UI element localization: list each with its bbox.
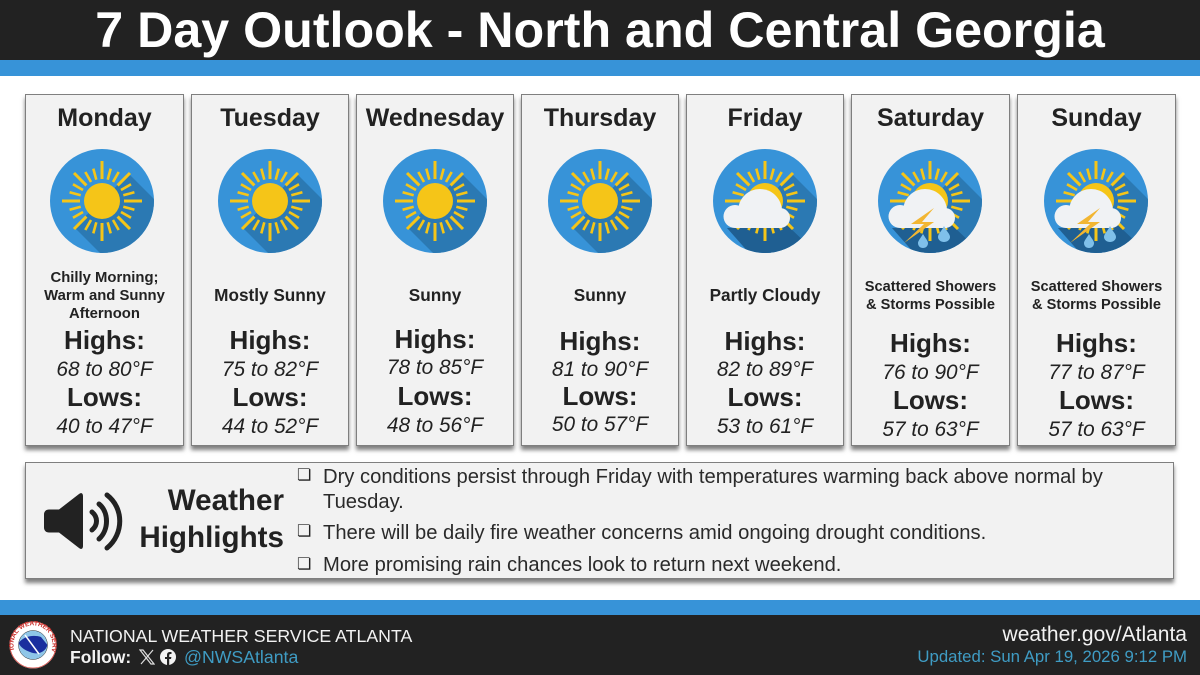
follow label: Follow: xyxy=(70,647,131,667)
bullet 1 text: Tuesday. xyxy=(323,490,404,512)
highs range: 75 to 82°F xyxy=(222,358,318,381)
footer org name: NATIONAL WEATHER SERVICE ATLANTA xyxy=(70,626,412,646)
panel: Saturday xyxy=(851,94,1010,446)
lows range: 44 to 52°F xyxy=(222,415,318,438)
highs label: Highs: xyxy=(64,325,145,355)
title: 7 Day Outlook - North and Central Georgia xyxy=(95,2,1105,58)
icon: sun xyxy=(548,149,652,253)
social handle: @NWSAtlanta xyxy=(184,647,298,667)
panel: Thursday xyxy=(521,94,679,446)
icon: NWS logo xyxy=(9,621,57,668)
day heading: Sunday xyxy=(1051,104,1142,132)
highs range: 76 to 90°F xyxy=(882,361,979,384)
day heading: Thursday xyxy=(544,104,656,132)
highlights heading: Weather xyxy=(168,484,284,517)
icon: Facebook xyxy=(160,649,176,665)
highs label: Highs: xyxy=(395,324,475,354)
highs range: 78 to 85°F xyxy=(387,356,483,379)
lows label: Lows: xyxy=(727,382,803,412)
day heading: Friday xyxy=(727,104,803,132)
panel: weather highlights xyxy=(25,462,1174,579)
forecast description: Chilly Morning; xyxy=(50,270,159,286)
footer blue stripe xyxy=(0,600,1200,615)
forecast description: & Storms Possible xyxy=(866,297,995,313)
forecast description: Afternoon xyxy=(69,306,140,322)
bullet 1 text xyxy=(323,466,1103,512)
highs range: 68 to 80°F xyxy=(56,358,153,381)
highs range: 82 to 89°F xyxy=(717,358,813,381)
website: weather.gov/Atlanta xyxy=(1003,623,1187,646)
day heading: Tuesday xyxy=(220,104,320,132)
header bar xyxy=(0,0,1200,76)
lows range: 50 to 57°F xyxy=(552,413,648,436)
day heading: Monday xyxy=(57,104,152,132)
icon: speaker xyxy=(44,492,122,550)
icon: sun xyxy=(50,149,154,253)
highs label: Highs: xyxy=(725,326,805,356)
bullet 1 text: Dry conditions persist through Friday with temperatures warming back above normal by xyxy=(323,466,1103,488)
icon: partly cloudy xyxy=(713,149,817,253)
icon: storm xyxy=(878,149,982,253)
forecast description: Warm and Sunny xyxy=(44,288,165,304)
lows label: Lows: xyxy=(67,382,142,412)
panel: Tuesday xyxy=(191,94,349,446)
forecast description xyxy=(44,270,165,322)
day heading: Saturday xyxy=(877,104,984,132)
icon: storm xyxy=(1044,149,1148,253)
forecast description: Scattered Showers xyxy=(865,279,996,295)
day heading: Wednesday xyxy=(366,104,504,132)
footer bar xyxy=(0,600,1200,675)
forecast description xyxy=(865,279,996,313)
lows range: 57 to 63°F xyxy=(882,418,979,441)
highs label: Highs: xyxy=(560,326,640,356)
forecast description: Sunny xyxy=(574,285,626,305)
highs range: 81 to 90°F xyxy=(552,358,648,381)
forecast description xyxy=(1031,279,1162,313)
forecast description: Partly Cloudy xyxy=(710,285,820,305)
lows label: Lows: xyxy=(232,382,308,412)
updated timestamp: Updated: Sun Apr 19, 2026 9:12 PM xyxy=(917,647,1187,666)
bullet 3 marker: ❏ xyxy=(297,554,311,573)
highs label: Highs: xyxy=(1056,328,1137,358)
panel: Friday xyxy=(686,94,844,446)
lows range: 48 to 56°F xyxy=(387,414,483,437)
icon: sun xyxy=(383,149,487,253)
panel: Monday xyxy=(25,94,184,446)
forecast description: Scattered Showers xyxy=(1031,279,1162,295)
bullet 2 text: There will be daily fire weather concerns amid ongoing drought conditions. xyxy=(323,522,986,544)
highlights heading: Highlights xyxy=(139,521,284,554)
highs label: Highs: xyxy=(230,325,310,355)
highlights heading xyxy=(139,484,284,554)
panel: Wednesday xyxy=(356,94,514,446)
highlight bullets xyxy=(297,465,1103,576)
lows label: Lows: xyxy=(893,385,968,415)
bullet 1 marker: ❏ xyxy=(297,465,311,484)
lows range: 40 to 47°F xyxy=(56,415,153,438)
lows label: Lows: xyxy=(562,381,638,411)
lows label: Lows: xyxy=(1059,385,1134,415)
panel: Sunday xyxy=(1017,94,1176,446)
lows range: 57 to 63°F xyxy=(1048,418,1145,441)
lows range: 53 to 61°F xyxy=(717,415,813,438)
highs range: 77 to 87°F xyxy=(1048,361,1145,384)
icon: sun xyxy=(218,149,322,253)
lows label: Lows: xyxy=(397,381,473,411)
header blue stripe xyxy=(0,60,1200,76)
highs label: Highs: xyxy=(890,328,971,358)
forecast description: Mostly Sunny xyxy=(214,285,326,305)
forecast description: & Storms Possible xyxy=(1032,297,1161,313)
bullet 3 text: More promising rain chances look to return next weekend. xyxy=(323,554,841,576)
forecast description: Sunny xyxy=(409,285,461,305)
icon: X xyxy=(139,649,155,665)
bullet 2 marker: ❏ xyxy=(297,521,311,540)
